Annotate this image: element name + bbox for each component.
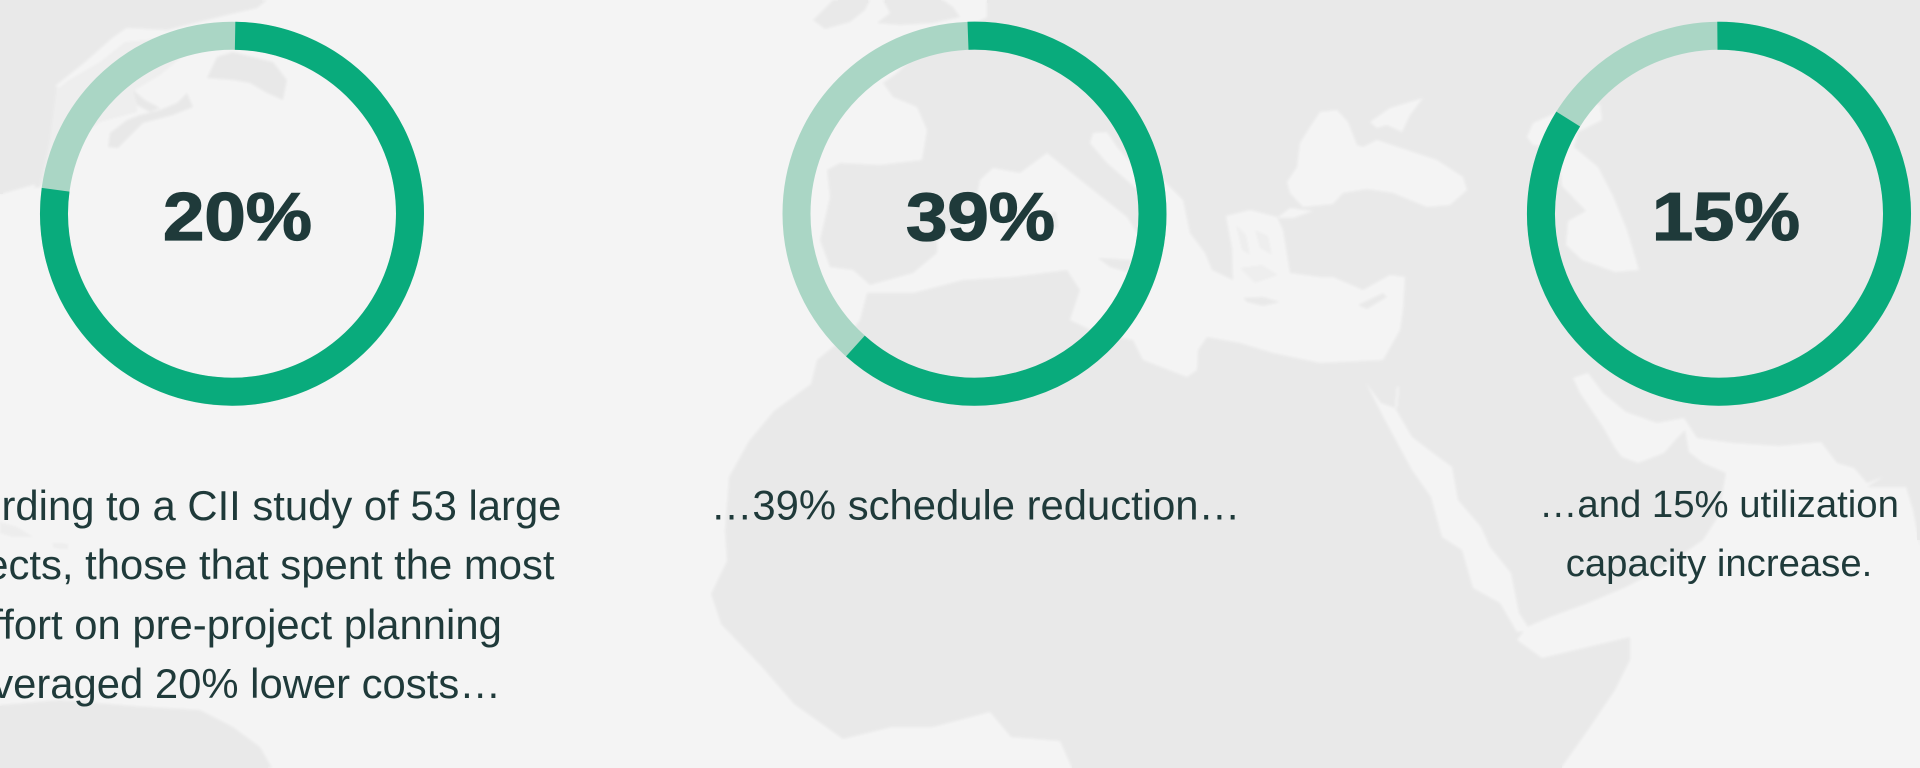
text: schedule statement: …39% schedule reduction… [711,482,1240,528]
panel: 20% lower costs [0,36,561,707]
Persian Gulf and Indian Ocean [1517,373,1920,768]
Aegean islands [1236,225,1278,283]
text: cost statement [0,482,561,707]
Caspian Sea [1527,104,1639,272]
North America landmass [0,0,287,196]
Mediterranean islands [1052,212,1387,309]
Red Sea [1366,383,1530,632]
donut chart: 39% [796,36,1152,392]
Gulf of Aqaba [1396,387,1398,408]
Ireland and Britain [813,0,960,29]
text: utilization statement [1539,483,1899,585]
Caribbean islands [0,522,68,549]
text: utilization statement: …and 15% utilization [1539,483,1899,526]
donut chart: 15%: 15% [1652,179,1800,255]
donut chart: 20%: 20% [163,179,312,255]
Europe, Africa and Asia landmass [711,0,1920,768]
donut chart: 15% [1541,36,1897,392]
panel: 15% utilization increase [1539,36,1899,585]
Sea of Marmara [1277,208,1313,218]
text: utilization statement: capacity increase. [1566,542,1872,585]
donut chart: 20% [54,36,410,392]
panel: 39% schedule reduction [711,36,1240,528]
Black Sea [1287,110,1467,207]
Sea of Azov [1370,98,1423,132]
Mediterranean Sea [867,132,1405,377]
donut chart: 39%: 39% [906,179,1055,255]
South America landmass [0,700,272,768]
